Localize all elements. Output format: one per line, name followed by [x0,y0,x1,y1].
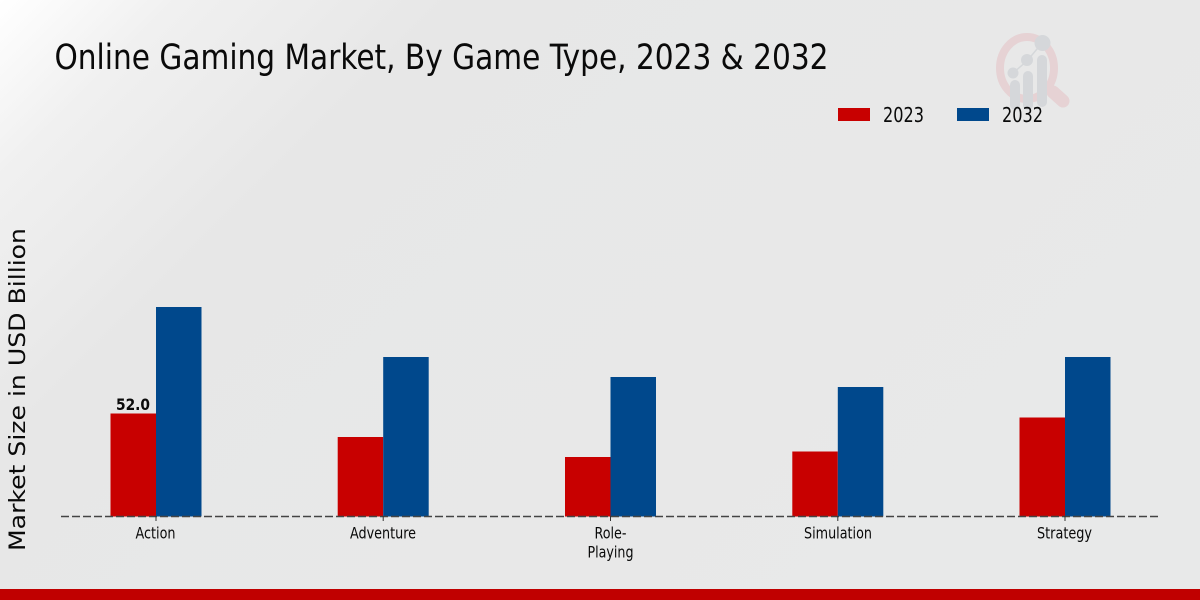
title: Online Gaming Market, By Game Type, 2023 & 2032 [54,38,828,78]
y axis label: Market Size in USD Billion [5,228,31,551]
footer bar [0,589,1200,600]
legend [838,103,1043,127]
x axis labels: Adventure [350,524,416,542]
icon: watermark logo [1000,35,1063,110]
group: Strategy [1020,357,1110,516]
x axis labels [136,524,1092,562]
data label: 52.0: 52.0 [116,395,150,414]
group: Role-Playing [565,377,656,516]
x axis labels: Action [136,524,176,542]
x axis labels: Playing [588,542,634,562]
x axis labels: Simulation [804,524,872,542]
group: Simulation [792,387,883,516]
bar chart [61,307,1160,521]
x axis labels: Role- [594,524,626,542]
legend item: 2032: 2032 [1002,103,1043,127]
legend item: 2032 [957,103,1043,127]
group: Action [110,307,202,516]
x axis labels: Strategy [1037,524,1092,542]
legend item: 2023: 2023 [883,103,924,127]
group: Adventure [338,357,429,516]
legend item: 2023 [838,103,924,127]
